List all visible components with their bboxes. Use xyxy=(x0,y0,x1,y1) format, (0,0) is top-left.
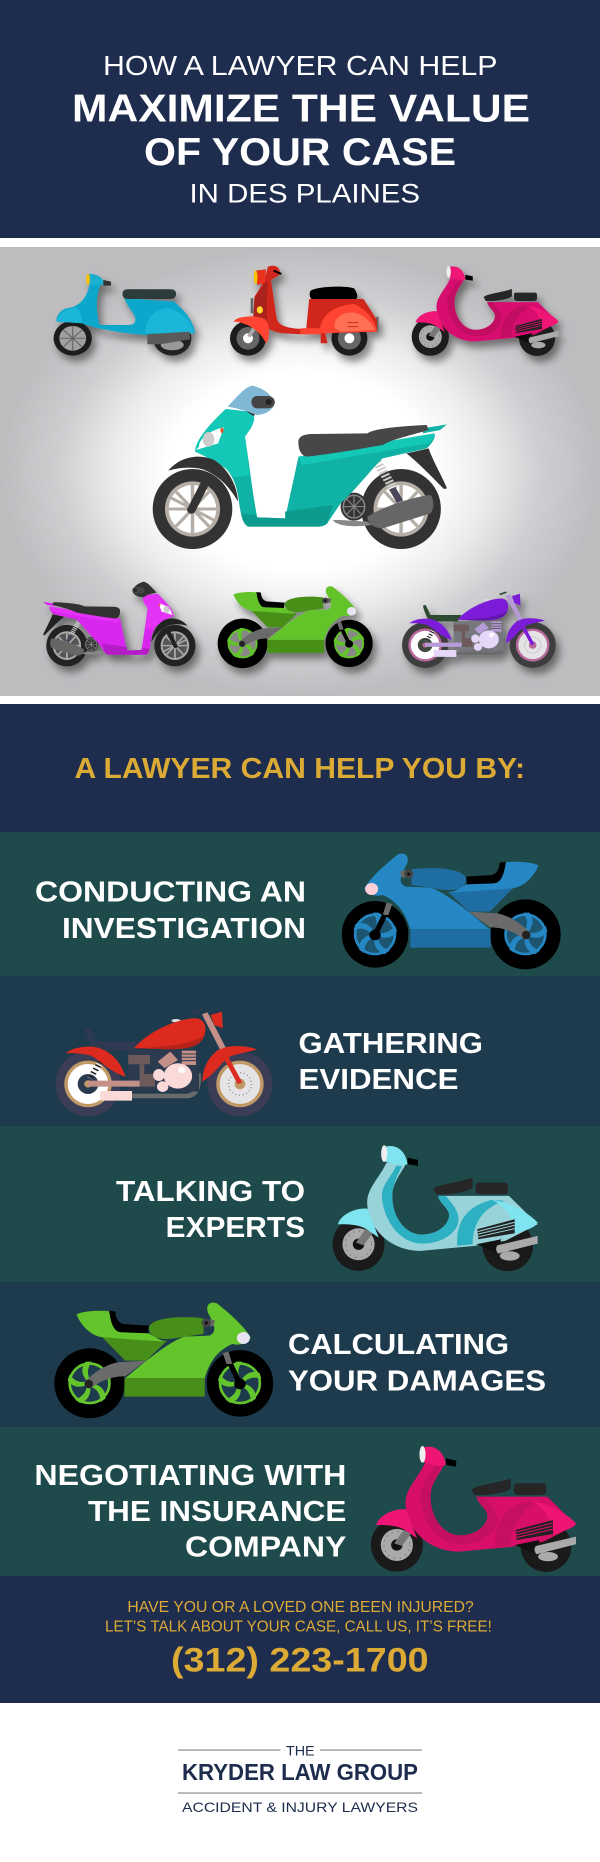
panel: talking to experts xyxy=(0,1126,600,1282)
text: negotiating with the insurance company: NEGOTIATING WITH xyxy=(34,1460,346,1492)
icon: blue scooter xyxy=(54,274,195,356)
panel: conducting an investigation xyxy=(0,832,600,976)
text: conducting an investigation: INVESTIGATION xyxy=(62,913,306,945)
heading: last line: IN DES PLAINES xyxy=(190,178,420,208)
panel: calculating your damages xyxy=(0,1282,600,1427)
text: conducting an investigation xyxy=(35,876,306,945)
icon: green sport bike xyxy=(218,586,373,668)
text: talking to experts: TALKING TO xyxy=(116,1176,305,1208)
text: gathering evidence: EVIDENCE xyxy=(298,1064,458,1096)
icon: red cruiser xyxy=(55,1009,272,1116)
text: negotiating with the insurance company: THE INSURANCE xyxy=(88,1496,346,1528)
logo: the kryder law group: ACCIDENT & INJURY LAWYERS xyxy=(182,1799,418,1815)
icon: light blue scooter xyxy=(333,1145,538,1271)
panel: negotiating with the insurance company xyxy=(0,1427,600,1576)
icon: large teal scooter xyxy=(153,386,447,549)
icon: magenta scooter xyxy=(43,582,196,666)
panel: lawyer heading band xyxy=(0,704,600,832)
panel: gathering evidence xyxy=(0,976,600,1126)
text: gathering evidence: GATHERING xyxy=(298,1028,483,1060)
logo: the kryder law group: THE xyxy=(286,1742,315,1758)
text: calculating your damages xyxy=(288,1329,546,1398)
heading: first line: HOW A LAWYER CAN HELP xyxy=(103,50,498,81)
panel: header xyxy=(0,0,600,238)
logo: the kryder law group xyxy=(178,1742,422,1815)
text: talking to experts: EXPERTS xyxy=(166,1212,305,1244)
logo: the kryder law group: KRYDER LAW GROUP xyxy=(182,1759,418,1785)
text: negotiating with the insurance company xyxy=(34,1460,346,1564)
icon: red scooter xyxy=(230,266,378,356)
text: talking to experts xyxy=(116,1176,305,1244)
text: negotiating with the insurance company: COMPANY xyxy=(185,1532,346,1564)
panel: call to action xyxy=(0,1576,600,1703)
text: call to action line two: LET’S TALK ABOUT YOUR CASE, CALL US, IT’S FREE! xyxy=(105,1619,492,1636)
icon: pink scooter top xyxy=(412,266,558,356)
icon: green sport bike large xyxy=(54,1303,273,1418)
text: conducting an investigation: CONDUCTING AN xyxy=(35,876,306,908)
heading: main line two: OF YOUR CASE xyxy=(144,131,456,174)
text: phone number: (312) 223-1700 xyxy=(171,1642,429,1680)
icon: blue sport bike xyxy=(342,854,561,969)
heading: a lawyer can help you by: A LAWYER CAN HELP YOU BY: xyxy=(74,753,525,785)
text: calculating your damages: CALCULATING xyxy=(288,1329,509,1361)
text: calculating your damages: YOUR DAMAGES xyxy=(288,1366,546,1398)
icon: pink scooter large xyxy=(371,1446,576,1572)
text: gathering evidence xyxy=(298,1028,483,1096)
icon: purple cruiser xyxy=(402,592,556,668)
panel: motorcycles showcase xyxy=(0,247,600,696)
heading: main line one: MAXIMIZE THE VALUE xyxy=(72,88,530,130)
text: call to action line one: HAVE YOU OR A LOVED ONE BEEN INJURED? xyxy=(127,1599,474,1616)
